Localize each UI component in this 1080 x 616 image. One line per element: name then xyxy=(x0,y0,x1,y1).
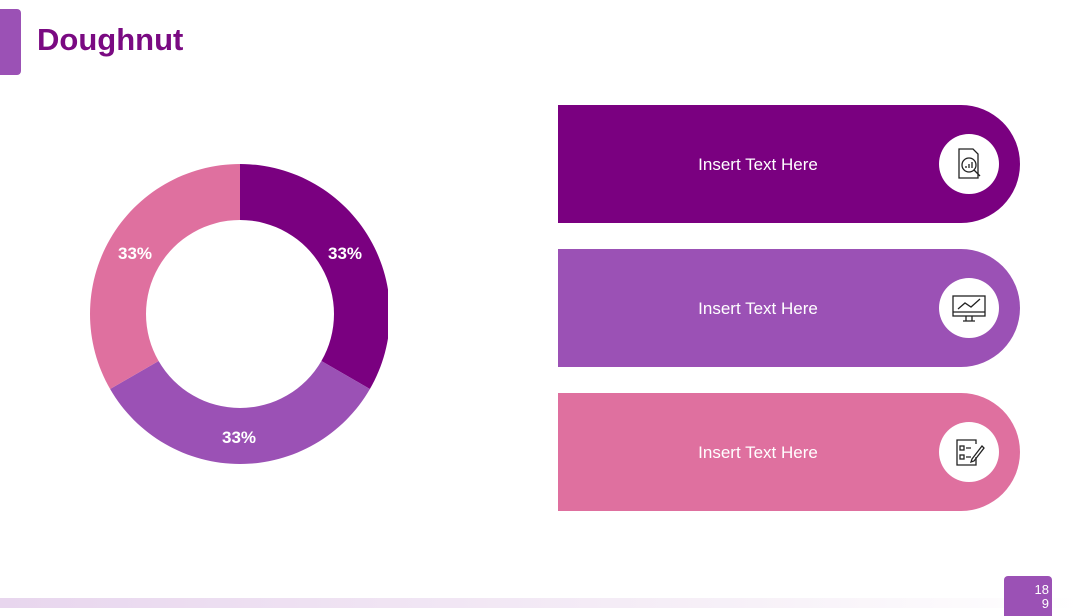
labels: 33% xyxy=(118,244,152,263)
icon: report magnifier xyxy=(939,134,999,194)
title: Doughnut xyxy=(37,22,183,57)
page number: 9 xyxy=(1042,596,1049,611)
page number xyxy=(1004,576,1052,616)
bar 3: Insert Text Here xyxy=(698,443,818,462)
title accent xyxy=(0,9,21,75)
doughnut chart xyxy=(90,164,388,464)
labels xyxy=(118,244,362,447)
segment purple xyxy=(240,164,390,389)
bar 2: Insert Text Here xyxy=(698,299,818,318)
segment lavender xyxy=(110,361,370,464)
segment pink xyxy=(90,164,240,389)
bar 2 xyxy=(558,249,1020,367)
icon: monitor chart xyxy=(939,278,999,338)
labels: 33% xyxy=(222,428,256,447)
bar 1 xyxy=(558,105,1020,223)
icon: checklist pencil xyxy=(939,422,999,482)
labels: 33% xyxy=(328,244,362,263)
bar 3 xyxy=(558,393,1020,511)
bar 1: Insert Text Here xyxy=(698,155,818,174)
footer band xyxy=(0,598,1080,608)
page number: 18 xyxy=(1035,582,1049,597)
